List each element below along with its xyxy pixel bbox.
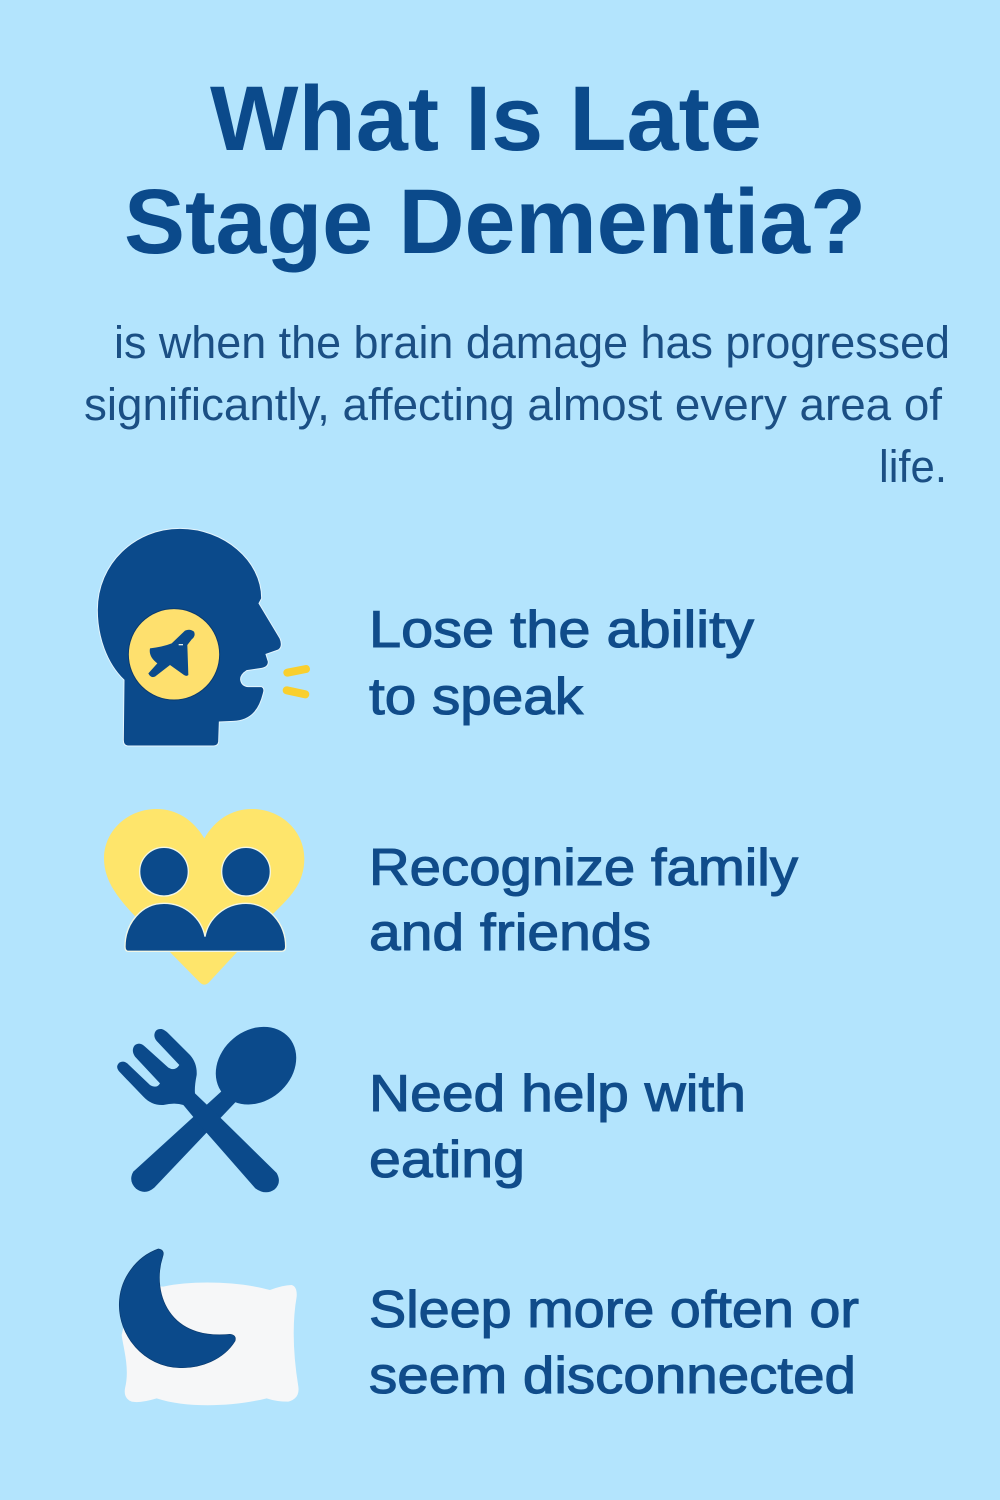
icon: speaking head with muted speaker [97,528,306,746]
intro text block: significantly, affecting almost every area of [84,379,943,430]
row: need help with eating [117,1011,746,1192]
row: lose the ability to speak [97,528,754,746]
label: recognize family and friends [369,839,798,962]
label: need help with eating: Need help with [369,1065,746,1123]
title [124,68,866,273]
label: need help with eating [369,1065,746,1189]
label: lose the ability to speak: Lose the ability [369,601,754,659]
label: sleep more often or seem disconnected [369,1281,859,1405]
label: recognize family and friends: Recognize family [369,839,798,897]
label: recognize family and friends: and friends [369,904,651,962]
title: What Is Late [210,68,762,170]
icon: crossed fork and spoon [117,1011,312,1192]
title: Stage Dementia? [124,171,866,273]
intro text block: life. [879,441,947,492]
icon: heart with two people [104,809,304,985]
icon: moon on pillow [119,1249,299,1405]
row: sleep more often or seem disconnected [119,1249,859,1405]
intro text block: is when the brain damage has progressed [114,317,950,368]
row: recognize family and friends [104,809,798,985]
label: lose the ability to speak [369,601,754,726]
label: lose the ability to speak: to speak [369,668,584,726]
label: sleep more often or seem disconnected: seem disconnected [369,1347,856,1405]
label: need help with eating: eating [369,1131,525,1189]
intro text block [84,317,950,492]
label: sleep more often or seem disconnected: Sleep more often or [369,1281,859,1339]
